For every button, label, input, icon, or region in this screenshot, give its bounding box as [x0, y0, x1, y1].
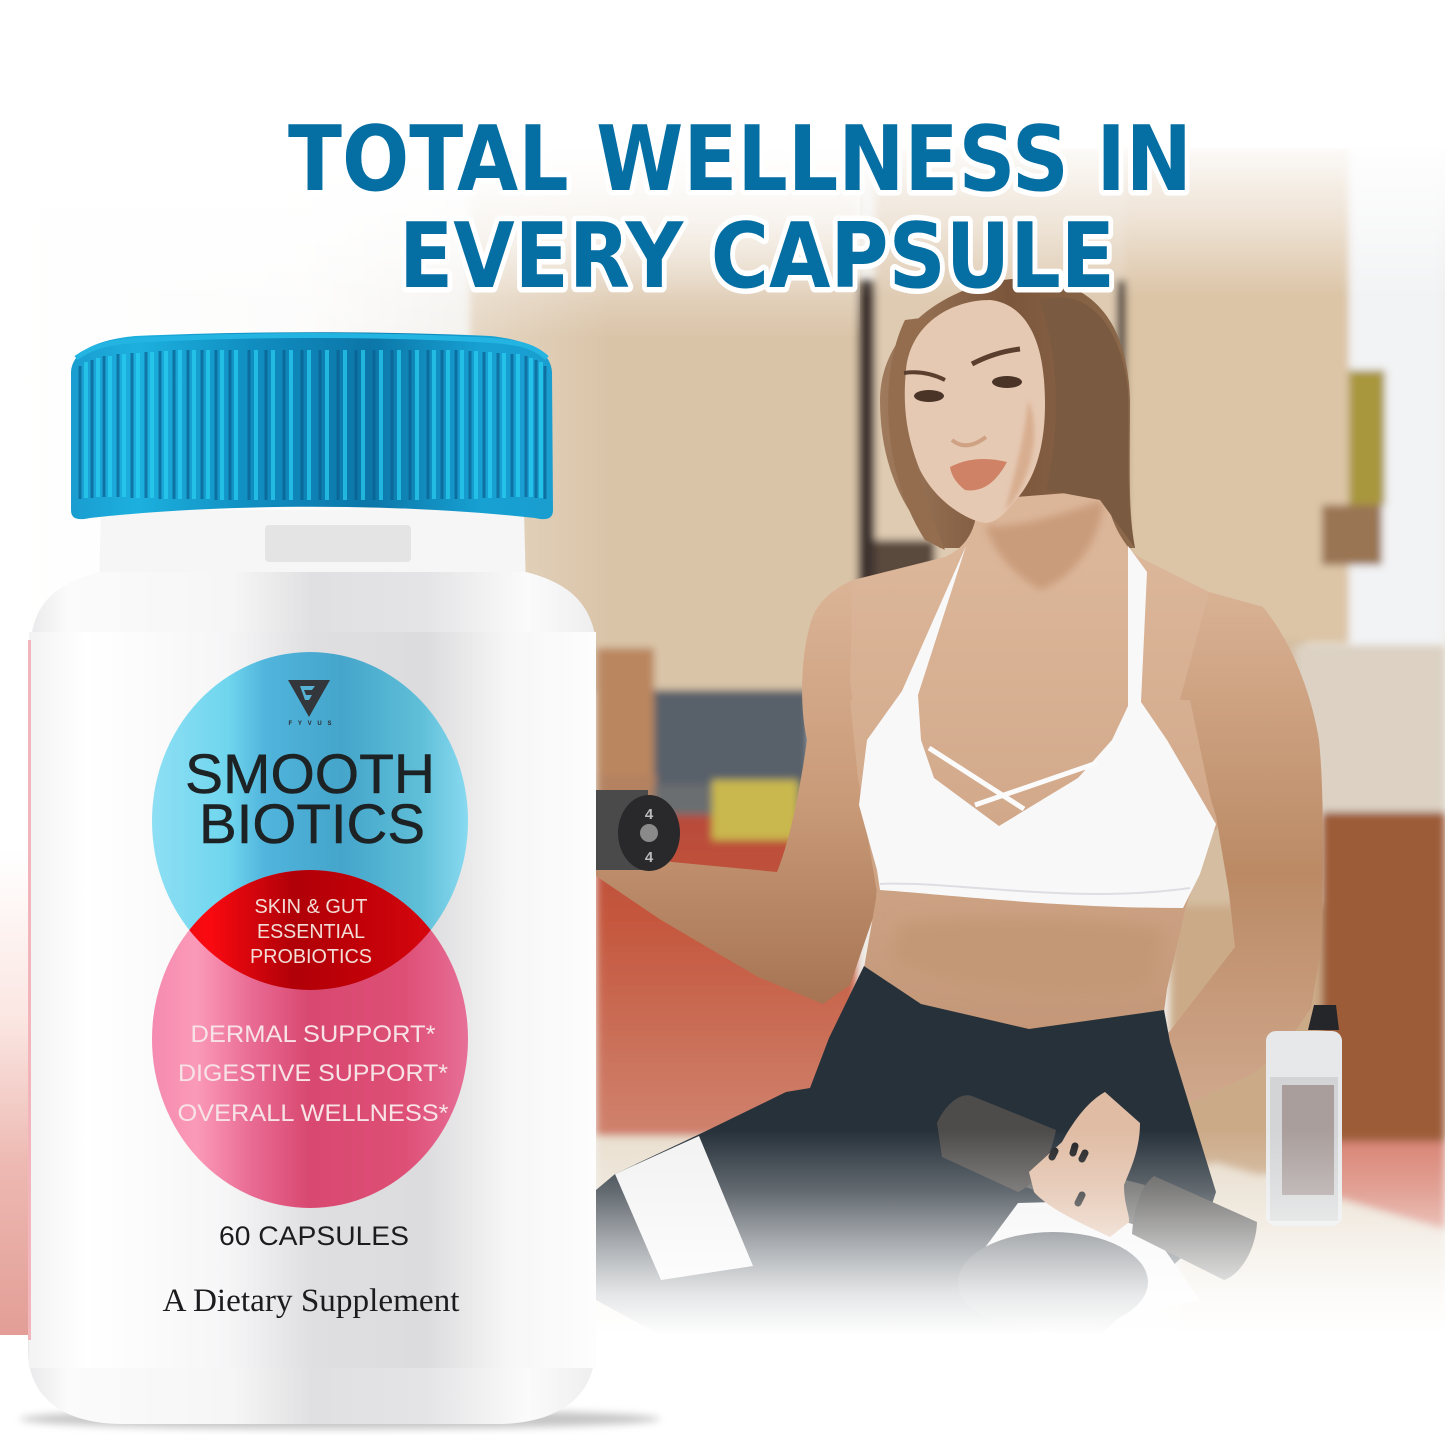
dark knee	[958, 1232, 1148, 1332]
title: EVERY CAPSULE	[399, 204, 1115, 309]
bottom fade	[596, 1130, 1445, 1335]
benefits text	[178, 1021, 448, 1127]
benefits text: DERMAL SUPPORT*	[190, 1021, 436, 1048]
benefits text: DIGESTIVE SUPPORT*	[178, 1060, 448, 1087]
torso	[850, 700, 1216, 1032]
cap	[71, 332, 553, 519]
cap dark ridges	[80, 350, 545, 500]
overlap text: PROBIOTICS	[250, 946, 372, 968]
overlap text	[250, 896, 372, 968]
white legging panel	[615, 1136, 753, 1280]
water bottle	[1266, 1005, 1342, 1226]
title: TOTAL WELLNESS IN	[288, 107, 1192, 212]
red overlap	[189, 870, 431, 990]
neck shading	[985, 500, 1104, 590]
eyes, brows, nose and lips	[904, 349, 1022, 490]
upper dumbbell: 4	[645, 849, 654, 866]
upper dumbbell: 4	[645, 806, 654, 823]
abdomen shading	[890, 918, 1165, 992]
right arm	[1105, 592, 1323, 1128]
benefits text: OVERALL WELLNESS*	[178, 1100, 448, 1127]
upper dumbbell	[596, 790, 680, 871]
title	[288, 107, 1192, 309]
bottle neck	[99, 510, 526, 590]
leggings	[596, 966, 1216, 1335]
blue circle	[152, 652, 468, 990]
left faded wash	[0, 243, 566, 850]
brand logo	[288, 680, 332, 727]
supplement bottle	[28, 332, 596, 1424]
cap light ridges	[86, 350, 541, 500]
product name: BIOTICS	[199, 792, 425, 855]
left arm	[596, 580, 880, 1004]
brand logo: FYVUS	[288, 721, 332, 727]
label wrap	[29, 632, 596, 1368]
white knee panel	[964, 1200, 1200, 1335]
white sports bra	[859, 546, 1216, 908]
lower dumbbell	[937, 1095, 1257, 1280]
capsule count: 60 CAPSULES	[219, 1221, 409, 1251]
pink circle	[152, 870, 468, 1208]
hand on dumbbell	[1029, 1092, 1140, 1237]
bottle shadow	[20, 1409, 660, 1429]
bottle body	[28, 572, 596, 1424]
hair back	[880, 278, 1135, 548]
neck and chest	[815, 490, 1290, 830]
woman photo illustration	[596, 278, 1445, 1335]
product name: SMOOTH	[185, 742, 435, 805]
overlap text: ESSENTIAL	[257, 921, 365, 943]
dietary supplement line: A Dietary Supplement	[162, 1283, 460, 1319]
overlap text: SKIN & GUT	[254, 896, 368, 918]
product name	[185, 742, 435, 855]
hair front strands	[888, 315, 945, 550]
face shading	[1005, 400, 1034, 512]
face	[905, 300, 1045, 523]
black nails	[1052, 1146, 1085, 1203]
